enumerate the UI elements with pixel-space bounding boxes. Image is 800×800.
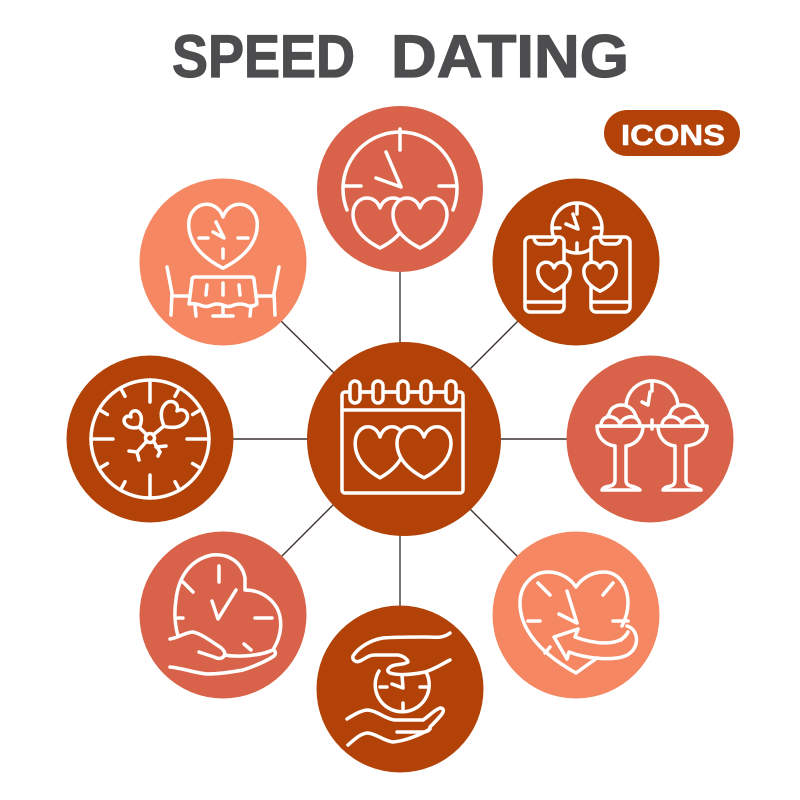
panel: center calendar — [307, 342, 501, 536]
icon: heart clock on hand — [170, 555, 281, 674]
title: SPEED — [172, 23, 355, 90]
title — [172, 23, 629, 90]
icon: hands holding clock — [347, 633, 450, 745]
panel: left clock with arrows — [66, 356, 234, 522]
icon: calendar with hearts — [342, 381, 463, 493]
panel: right sundaes — [566, 356, 734, 522]
title: DATING — [391, 23, 629, 90]
panel: bottom right heart with arrow — [492, 532, 660, 698]
panel: bottom hands with clock — [316, 606, 484, 772]
icon: clock and hearts — [343, 129, 457, 248]
panel: top left dinner table — [140, 178, 306, 346]
badge: icons — [604, 110, 740, 156]
icon: phones with clock and hearts — [525, 203, 630, 312]
icon: clock with heart hands — [91, 380, 209, 498]
icon: heart clock with arrow — [520, 572, 637, 673]
icon: sundae glasses and clock — [597, 381, 707, 490]
panel: bottom left hand with heart — [140, 532, 306, 698]
panel: top clock with two hearts — [317, 106, 483, 272]
badge: icons: ICONS — [621, 120, 725, 152]
panel: top right phones — [492, 178, 660, 346]
icon: heart clock and table — [167, 204, 279, 316]
connector lines — [233, 272, 567, 606]
